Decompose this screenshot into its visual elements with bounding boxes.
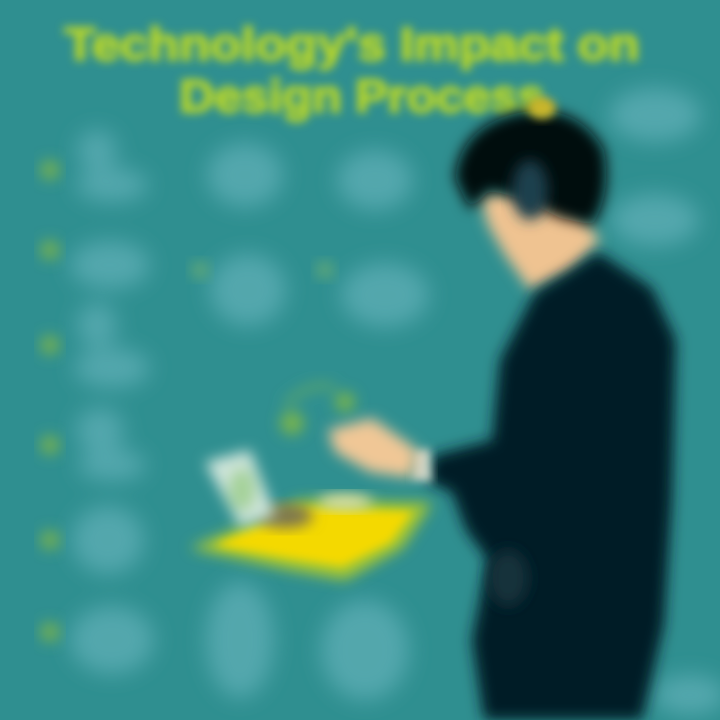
title: Design Process xyxy=(180,70,544,122)
person: hair accent xyxy=(528,97,556,119)
person: body xyxy=(428,252,676,720)
list column 3: faint labels xyxy=(321,150,429,700)
right column: faint labels xyxy=(609,88,720,715)
person: neck and face xyxy=(480,190,600,290)
person: cuff xyxy=(412,448,432,482)
title xyxy=(64,18,640,122)
tablet: yellow surface xyxy=(215,508,412,566)
person xyxy=(328,97,676,720)
person: hand xyxy=(328,418,418,478)
person: headphone detail xyxy=(512,160,548,220)
floating green sparks xyxy=(280,386,355,435)
tablet: green halo xyxy=(190,500,432,580)
tablet xyxy=(190,494,432,580)
list column 2: faint labels xyxy=(206,143,286,698)
tablet: light highlight xyxy=(317,494,373,510)
list column 3: green bullet xyxy=(316,261,334,279)
list column 1: faint labels xyxy=(70,130,154,674)
list column 2: green bullet xyxy=(191,261,209,279)
title: Technology's Impact on xyxy=(64,18,640,70)
tablet: objects on surface xyxy=(257,504,313,528)
list column 1: green bullets xyxy=(40,160,60,642)
person: lower shading xyxy=(488,550,528,606)
icon: light document xyxy=(205,450,275,527)
person: hair xyxy=(455,111,606,225)
